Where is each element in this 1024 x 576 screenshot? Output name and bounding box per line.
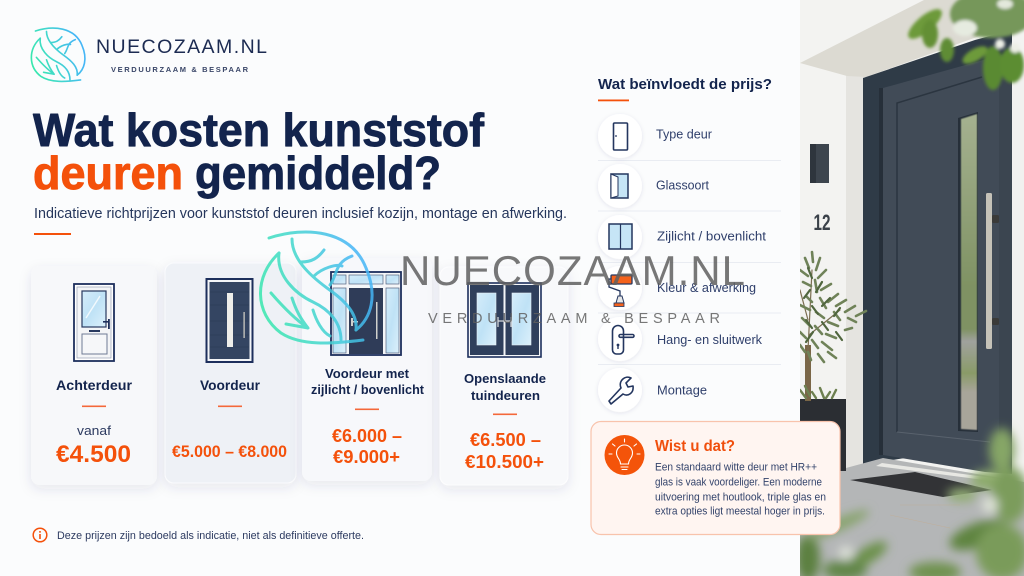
logo name: NUECOZAAM.NL [96, 36, 267, 58]
label: voordeur met zijlicht: zijlicht / bovenlicht [311, 383, 425, 397]
price: achterdeur: €4.500 [56, 441, 131, 468]
foliage: bottom foreground [796, 428, 1024, 576]
title: deuren [33, 147, 183, 199]
label: voordeur met zijlicht [311, 367, 425, 397]
factor: hang- en sluitwerk: Hang- en sluitwerk [657, 333, 763, 347]
title accent line [34, 233, 71, 235]
label: openslaande tuindeuren [464, 371, 546, 403]
callout text: glas is vaak voordeliger. Een moderne [655, 476, 822, 488]
logo mark: leaf circle [31, 28, 85, 81]
icon: door with side lights [331, 272, 401, 355]
price: achterdeur [56, 423, 131, 468]
callout text: uitvoering met houtlook, triple glas en [655, 492, 826, 504]
factor: type deur [598, 114, 712, 158]
factor: montage [598, 368, 707, 412]
factor: kleur & afwerking [598, 266, 756, 310]
callout text: Een standaard witte deur met HR++ [655, 462, 817, 474]
foliage: top right [904, 0, 1024, 90]
factor: glassoort [598, 164, 710, 208]
icon: french doors [468, 283, 541, 357]
factor: zijlicht / bovenlicht [598, 215, 767, 259]
title: gemiddeld? [195, 147, 441, 199]
watermark name: NUECOZAAM.NL [400, 247, 745, 294]
factor: zijlicht / bovenlicht: Zijlicht / bovenlicht [657, 230, 767, 244]
price: voordeur met zijlicht [332, 426, 402, 467]
icon: back door [74, 284, 114, 361]
panel: price factors [598, 77, 781, 412]
factor: kleur & afwerking: Kleur & afwerking [657, 281, 756, 295]
heading: price factors: Wat beïnvloedt de prijs? [598, 77, 772, 93]
subtitle: Indicatieve richtprijzen voor kunststof deuren inclusief kozijn, montage en afwerking. [34, 206, 567, 222]
icon: light bulb [604, 435, 644, 475]
title [33, 104, 485, 199]
factor: type deur: Type deur [656, 128, 712, 142]
label: openslaande tuindeuren: tuindeuren [471, 388, 540, 403]
label: voordeur met zijlicht: Voordeur met [325, 367, 410, 381]
watermark logo mark [260, 232, 372, 343]
factor: montage: Montage [657, 384, 707, 398]
callout heading: Wist u dat? [655, 438, 735, 455]
title: Wat kosten kunststof [33, 104, 485, 156]
price: achterdeur: vanaf [77, 423, 111, 438]
label: openslaande tuindeuren: Openslaande [464, 371, 546, 386]
watermark tagline: VERDUURZAAM & BESPAAR [428, 311, 720, 327]
panel: voordeur [165, 263, 296, 483]
callout: wist u dat [591, 422, 840, 534]
panel: voordeur met zijlicht [302, 258, 432, 481]
footnote: Deze prijzen zijn bedoeld als indicatie, niet als definitieve offerte. [57, 530, 364, 542]
label: achterdeur: Achterdeur [56, 378, 133, 393]
price: openslaande tuindeuren: €6.500 – [470, 430, 541, 450]
olive plant [800, 252, 866, 398]
icon: front door [206, 279, 252, 362]
logo tagline: VERDUURZAAM & BESPAAR [111, 65, 249, 74]
panel: openslaande tuindeuren [440, 267, 568, 485]
callout text: extra opties ligt meestal hoger in prijs. [655, 506, 825, 518]
icon: info [33, 528, 47, 542]
price: voordeur: €5.000 – €8.000 [172, 443, 287, 461]
panel: achterdeur [31, 266, 157, 485]
photo: front door with anthracite plastic door [796, 0, 1024, 576]
logo [31, 28, 267, 81]
price: voordeur met zijlicht: €6.000 – [332, 426, 402, 446]
watermark [260, 232, 745, 343]
factor: glassoort: Glassoort [656, 178, 710, 192]
photo: front door with anthracite plastic door: 12 [814, 210, 830, 235]
factor: hang- en sluitwerk [598, 317, 763, 361]
price: voordeur met zijlicht: €9.000+ [333, 447, 400, 467]
price: openslaande tuindeuren: €10.500+ [465, 452, 544, 472]
price: openslaande tuindeuren [465, 430, 544, 472]
label: voordeur: Voordeur [200, 378, 261, 393]
callout text [655, 462, 826, 518]
